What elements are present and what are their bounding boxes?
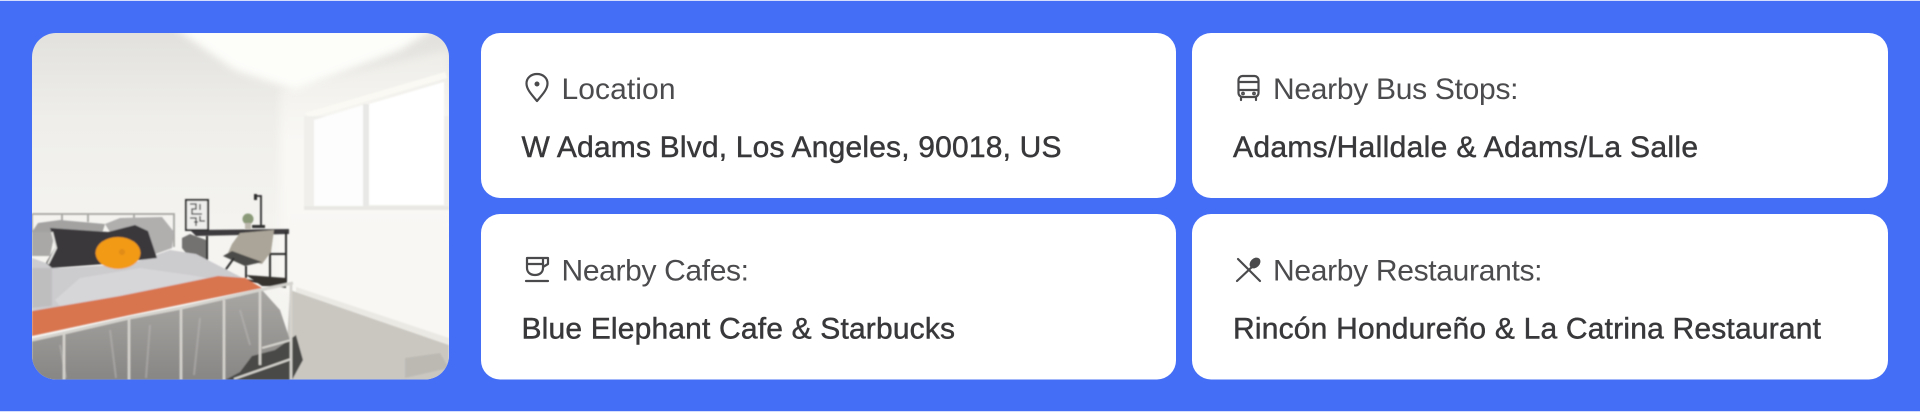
grey duvet side bbox=[32, 290, 300, 380]
heading: nearby cafes: Nearby Cafes: bbox=[562, 254, 749, 288]
heading: nearby restaurants: Nearby Restaurants: bbox=[1273, 254, 1542, 288]
heading: location: Location bbox=[562, 73, 676, 106]
restaurant names: Rincón Hondureño & La Catrina Restaurant bbox=[1233, 312, 1822, 346]
bed: light duvet bbox=[32, 250, 262, 312]
wall art bbox=[185, 199, 209, 231]
orange pillow bbox=[96, 237, 140, 269]
photo: bedroom bbox=[32, 25, 460, 380]
grey pillows bbox=[32, 217, 174, 256]
cafe names: Blue Elephant Cafe & Starbucks bbox=[522, 312, 955, 346]
window bbox=[304, 72, 449, 210]
panel: location bbox=[481, 33, 1176, 198]
dark pillow bbox=[46, 225, 157, 268]
metal footboard bbox=[32, 283, 293, 380]
icon: bus bbox=[1238, 76, 1258, 100]
desk with chair bbox=[182, 229, 289, 287]
floor bbox=[285, 290, 449, 380]
headboard bbox=[32, 214, 174, 247]
orange blanket bbox=[32, 276, 262, 336]
heading: nearby bus stops: Nearby Bus Stops: bbox=[1273, 73, 1518, 106]
panel: nearby restaurants bbox=[1192, 214, 1888, 380]
address: W Adams Blvd, Los Angeles, 90018, US bbox=[522, 131, 1062, 164]
panel: nearby bus stops bbox=[1192, 33, 1888, 198]
icon: map pin bbox=[526, 74, 548, 101]
panel: nearby cafes bbox=[481, 214, 1176, 380]
icon: coffee cup bbox=[526, 258, 548, 281]
icon: fork and spoon bbox=[1237, 257, 1261, 281]
desk lamp and plant bbox=[242, 194, 265, 229]
bus stop names: Adams/Halldale & Adams/La Salle bbox=[1233, 131, 1698, 164]
